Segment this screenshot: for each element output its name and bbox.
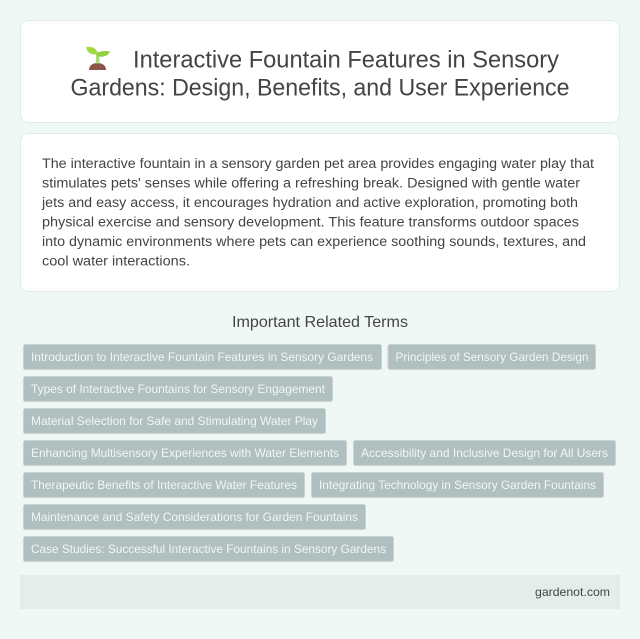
- tag list: [24, 344, 616, 562]
- footer source text: gardenot.com: [535, 585, 610, 599]
- tag: [24, 440, 346, 466]
- tag: Integrating Technology in Sensory Garden Fountains: [319, 478, 596, 492]
- tag: [354, 440, 616, 466]
- tag: Types of Interactive Fountains for Sensory Engagement: [31, 382, 326, 396]
- tag: [24, 472, 304, 498]
- tag: Therapeutic Benefits of Interactive Water Features: [31, 478, 297, 492]
- tag: [388, 344, 596, 370]
- icon: seedling: [86, 47, 110, 70]
- tag: [24, 344, 382, 370]
- tag: [24, 504, 366, 530]
- tag: Accessibility and Inclusive Design for All Users: [361, 446, 608, 460]
- text block: description: cool water interactions.: [42, 254, 190, 270]
- text block: description: stimulates pets' senses while offering a refreshing break. Designed with gentle water: [42, 176, 580, 192]
- tag: [24, 376, 332, 402]
- text block: description: [41, 156, 594, 270]
- panel: title card: [20, 20, 620, 122]
- tag: [312, 472, 604, 498]
- panel: description: [20, 134, 620, 292]
- text block: description: jets and easy access, it encourages hydration and active exploration, promoting both: [41, 195, 578, 211]
- tag: Maintenance and Safety Considerations for Garden Fountains: [31, 510, 358, 524]
- tag: [24, 536, 394, 562]
- heading: related terms: Important Related Terms: [232, 314, 408, 331]
- text block: description: physical exercise and sensory development. This feature transforms outdoor spaces: [42, 214, 579, 230]
- tag: Enhancing Multisensory Experiences with Water Elements: [31, 446, 339, 460]
- title: [70, 46, 570, 102]
- title: Gardens: Design, Benefits, and User Experience: [70, 74, 570, 102]
- tag: [24, 408, 326, 434]
- tag: Case Studies: Successful Interactive Fountains in Sensory Gardens: [31, 542, 386, 556]
- text block: description: The interactive fountain in a sensory garden pet area provides engaging water play that: [42, 156, 594, 172]
- title: Interactive Fountain Features in Sensory: [133, 46, 560, 74]
- tag: Principles of Sensory Garden Design: [396, 350, 588, 364]
- text block: description: into dynamic environments where pets can experience soothing sounds, textures, and: [42, 234, 586, 250]
- footer: [20, 575, 620, 609]
- tag: Material Selection for Safe and Stimulating Water Play: [31, 414, 318, 428]
- tag: Introduction to Interactive Fountain Features in Sensory Gardens: [31, 350, 373, 364]
